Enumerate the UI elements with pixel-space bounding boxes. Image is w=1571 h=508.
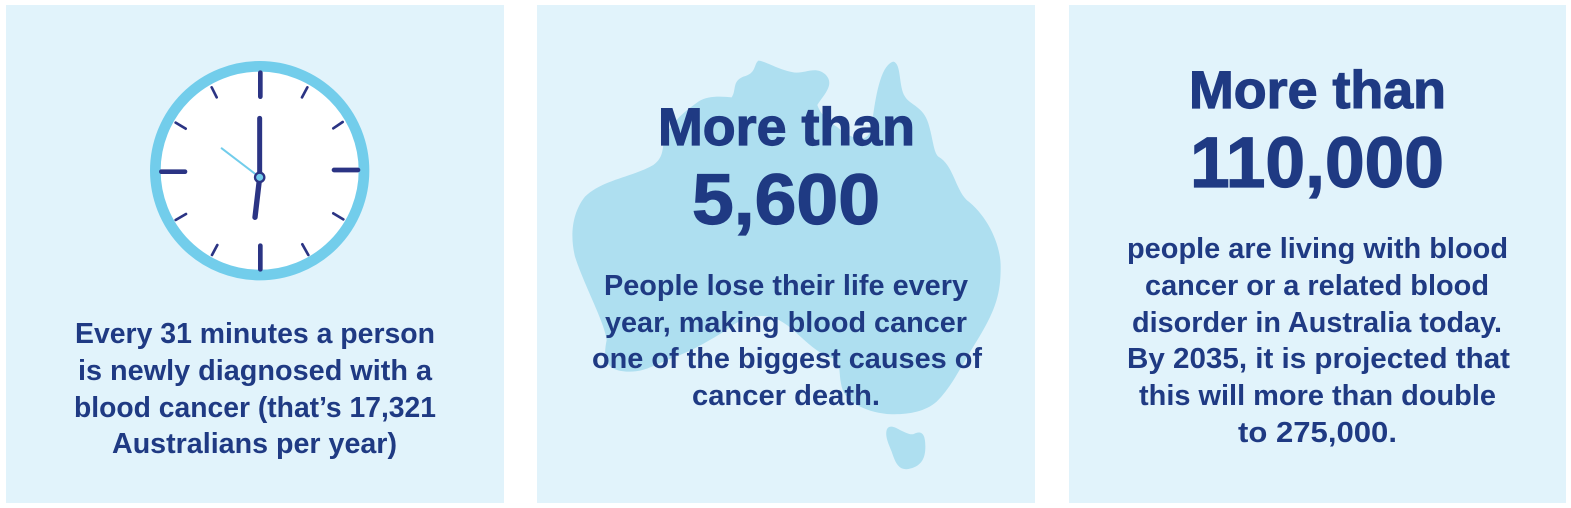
text: 110,000 description: people are living with blood (1127, 233, 1508, 265)
icon: map of Australia (572, 61, 1001, 469)
heading: More than: More than (658, 98, 915, 157)
text: 5,600 description: one of the biggest causes of (592, 343, 982, 375)
text: 110,000 description: By 2035, it is projected that (1127, 343, 1510, 375)
panel: more than 5,600 (537, 5, 1035, 503)
icon: Tasmania (886, 427, 925, 469)
text: 5,600 description: cancer death. (692, 380, 880, 412)
text: 110,000 description: this will more than double (1139, 380, 1496, 412)
icon: clock (155, 66, 364, 275)
text: 110,000 description: to 275,000. (1238, 417, 1397, 449)
text: 110,000 description: cancer or a related blood (1145, 270, 1489, 302)
text: every 31 minutes description: Every 31 minutes a person (75, 318, 435, 350)
text: 110,000 description: disorder in Australia today. (1132, 307, 1502, 339)
heading: More than: More than (1189, 61, 1446, 120)
text: every 31 minutes description (74, 318, 436, 460)
text: every 31 minutes description: Australians per year) (112, 428, 397, 460)
number: 110,000: 110,000 (1190, 124, 1444, 203)
panel: more than 110,000 (1069, 5, 1566, 503)
text: 5,600 description: People lose their life every (604, 270, 968, 302)
text: 110,000 description (1127, 233, 1510, 449)
panel: every 31 minutes (6, 5, 504, 503)
text: 5,600 description: year, making blood cancer (605, 307, 967, 339)
text: 5,600 description (592, 270, 982, 412)
number: 5,600: 5,600 (692, 161, 880, 240)
text: every 31 minutes description: blood cancer (that’s 17,321 (74, 392, 436, 424)
text: every 31 minutes description: is newly diagnosed with a (78, 355, 433, 387)
